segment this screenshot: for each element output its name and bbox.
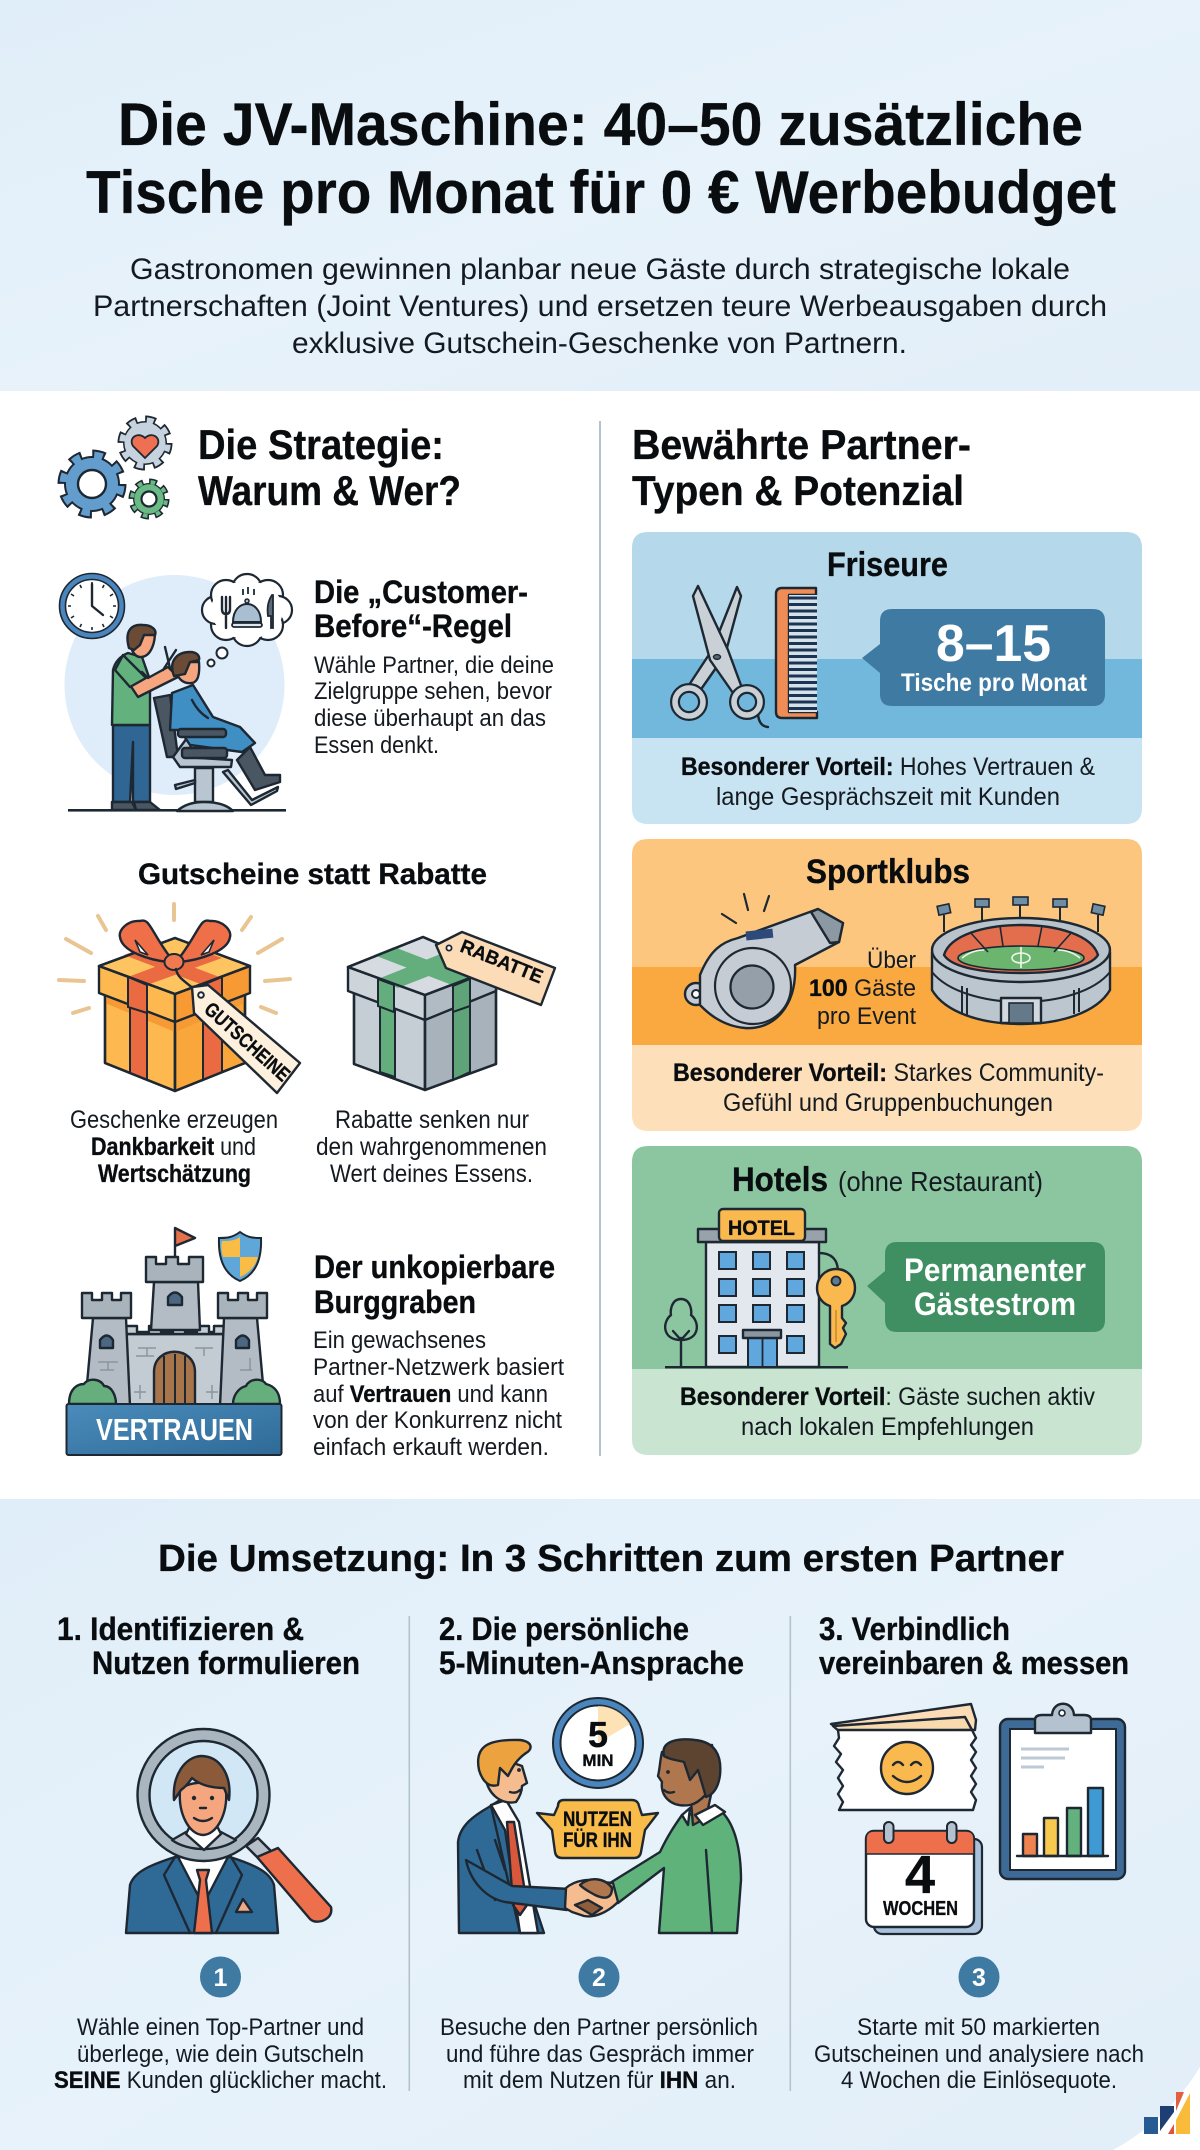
title: [86, 91, 1116, 226]
step heading: 1. Identifizieren &: [57, 1611, 304, 1647]
benefit text: Besonderer Vorteil: Gäste suchen aktiv: [680, 1383, 1095, 1411]
number badge: 1: [214, 1964, 228, 1992]
text: customer before rule: [314, 574, 554, 759]
caption: gifts: Dankbarkeit und: [91, 1133, 256, 1161]
icon: comb: [776, 588, 817, 718]
benefit text: [681, 753, 1095, 811]
icon: hotel building: [665, 1209, 855, 1368]
icon: calendar: WOCHEN: [883, 1898, 958, 1920]
title: Die JV-Maschine: 40–50 zusätzliche: [118, 91, 1083, 158]
icon: calendar: [866, 1822, 982, 1934]
step text: Wähle einen Top-Partner und: [77, 2014, 364, 2041]
heading: vouchers vs discounts: Gutscheine statt Rabatte: [138, 858, 487, 891]
stat text: [809, 947, 916, 1030]
icon: gears: [63, 420, 168, 516]
text: moat: Partner-Netzwerk basiert: [313, 1354, 564, 1381]
icon: magnifier on person: [126, 1729, 331, 1933]
discount tag: RABATTE: [457, 936, 546, 988]
step heading: Nutzen formulieren: [92, 1645, 360, 1681]
step heading: [819, 1611, 1129, 1681]
icon: gift with voucher tag: [59, 904, 300, 1093]
subtitle: exklusive Gutschein-Geschenke von Partnern.: [292, 327, 907, 360]
heading: strategy: [198, 421, 461, 514]
heading: partner types: Typen & Potenzial: [632, 467, 964, 514]
number badge: 3: [972, 1964, 986, 1992]
title: Tische pro Monat für 0 € Werbebudget: [86, 159, 1116, 226]
voucher tag: [192, 985, 300, 1093]
icon: castle with trust moat: [66, 1228, 282, 1455]
timer: [553, 1698, 643, 1788]
step heading: 5-Minuten-Ansprache: [439, 1645, 744, 1681]
benefit text: nach lokalen Empfehlungen: [741, 1413, 1034, 1441]
benefit text: Besonderer Vorteil: Hohes Vertrauen &: [681, 753, 1095, 781]
step heading: 3. Verbindlich: [819, 1611, 1010, 1647]
step 3: [814, 1611, 1144, 2094]
icon: thought bubble: [202, 574, 292, 666]
heading: implementation: Die Umsetzung: In 3 Schritten zum ersten Partner: [158, 1538, 1064, 1580]
step text: [814, 2014, 1144, 2094]
step text: 4 Wochen die Einlösequote.: [841, 2067, 1117, 2094]
step heading: [439, 1611, 744, 1681]
panel: implementation: [0, 1499, 1200, 2150]
icon: clock: [60, 574, 124, 638]
icon: hotel building: HOTEL: [728, 1217, 795, 1240]
voucher tag: GUTSCHEINE: [200, 998, 294, 1086]
heading: strategy: Warum & Wer?: [198, 467, 461, 514]
banner: benefit: [537, 1800, 658, 1858]
step text: Starte mit 50 markierten: [857, 2014, 1100, 2041]
text: moat: Ein gewachsenes: [313, 1327, 486, 1354]
caption: discounts: [316, 1106, 547, 1188]
icon: handshake people: [458, 1698, 741, 1933]
heading: strategy: Die Strategie:: [198, 421, 444, 468]
heading: partner types: Bewährte Partner-: [632, 421, 971, 468]
step text: [440, 2014, 758, 2094]
corner logo: [1113, 2067, 1200, 2150]
step text: Gutscheinen und analysiere nach: [814, 2041, 1144, 2068]
callout: permanent guest flow: Gästestrom: [914, 1286, 1076, 1322]
discount tag: [436, 932, 555, 1005]
timer: MIN: [582, 1751, 614, 1770]
banner: benefit: FÜR IHN: [563, 1829, 632, 1852]
icon: clipboard chart: [1000, 1704, 1125, 1879]
caption: gifts: [70, 1106, 278, 1188]
number badge: [578, 1956, 620, 1998]
icon: scissors: [675, 586, 768, 727]
left man: [458, 1740, 570, 1933]
banner: benefit: NUTZEN: [563, 1808, 632, 1831]
card title: Hotels: [732, 1161, 828, 1199]
benefit text: Gefühl und Gruppenbuchungen: [723, 1089, 1053, 1117]
step text: [54, 2014, 387, 2094]
number badge: [200, 1956, 241, 1998]
step 1: [54, 1611, 387, 2094]
step text: und führe das Gespräch immer: [446, 2041, 754, 2068]
heading: partner types: [632, 421, 971, 514]
caption: discounts: Rabatte senken nur: [335, 1106, 529, 1134]
subtitle: Partnerschaften (Joint Ventures) und ersetzen teure Werbeausgaben durch: [93, 290, 1107, 323]
callout: 8-15: [862, 609, 1105, 706]
card title: Sportklubs: [806, 853, 970, 891]
step text: mit dem Nutzen für IHN an.: [463, 2067, 736, 2094]
benefit text: lange Gesprächszeit mit Kunden: [716, 783, 1060, 811]
card title: Friseure: [827, 546, 948, 584]
step text: Besuche den Partner persönlich: [440, 2014, 758, 2041]
callout: permanent guest flow: [867, 1242, 1105, 1332]
number badge: [958, 1956, 1000, 1998]
step heading: 2. Die persönliche: [439, 1611, 689, 1647]
text: moat: auf Vertrauen und kann: [313, 1381, 548, 1408]
handshake: [565, 1879, 618, 1916]
caption: discounts: den wahrgenommenen: [316, 1133, 547, 1161]
text: customer before rule: Wähle Partner, die deine: [314, 652, 554, 679]
caption: gifts: Geschenke erzeugen: [70, 1106, 278, 1134]
stat text: pro Event: [817, 1003, 916, 1030]
callout: 8-15: Tische pro Monat: [901, 669, 1088, 697]
text: customer before rule: Essen denkt.: [314, 732, 439, 759]
text: customer before rule: diese überhaupt an das: [314, 705, 546, 732]
icon: castle with trust moat: VERTRAUEN: [96, 1412, 253, 1447]
stylist: [112, 625, 178, 810]
illustration: barber scene: [60, 574, 292, 812]
step 2: [439, 1611, 758, 2094]
benefit text: Besonderer Vorteil: Starkes Community-: [673, 1059, 1104, 1087]
subtitle: [93, 253, 1107, 360]
text: moat: [313, 1249, 564, 1461]
benefit text: [680, 1383, 1095, 1441]
panel: Hotels card: [632, 1146, 1142, 1455]
callout: 8-15: 8–15: [936, 615, 1051, 673]
text: moat: Burggraben: [314, 1284, 476, 1320]
shield: [219, 1232, 261, 1281]
icon: whistle: [685, 894, 843, 1028]
panel: strategy: [59, 420, 564, 1461]
step heading: [57, 1611, 360, 1681]
customer in chair: [154, 652, 280, 811]
icon: calendar: 4: [905, 1845, 935, 1905]
subtitle: Gastronomen gewinnen planbar neue Gäste durch strategische lokale: [130, 253, 1070, 286]
icon: vouchers: [831, 1704, 976, 1810]
panel: Sportklubs card: [632, 839, 1142, 1131]
text: customer before rule: Before“-Regel: [314, 608, 512, 644]
step text: überlege, wie dein Gutscheln: [77, 2041, 364, 2068]
text: moat: Der unkopierbare: [314, 1249, 555, 1285]
icon: stadium: [932, 897, 1110, 1024]
header panel: [0, 0, 1200, 391]
step heading: vereinbaren & messen: [819, 1645, 1129, 1681]
icon: grey gift with discount tag: [348, 932, 555, 1090]
text: customer before rule: Zielgruppe sehen, bevor: [314, 678, 552, 705]
stat text: Über: [867, 947, 916, 974]
card title: [732, 1161, 1043, 1199]
card title: (ohne Restaurant): [838, 1166, 1043, 1197]
number badge: 2: [592, 1964, 606, 1992]
icon: key: [817, 1253, 855, 1348]
benefit text: [673, 1059, 1104, 1117]
panel: Friseure card: [632, 532, 1142, 824]
caption: discounts: Wert deines Essens.: [330, 1160, 533, 1188]
callout: permanent guest flow: Permanenter: [904, 1252, 1086, 1288]
text: moat: einfach erkauft werden.: [313, 1434, 549, 1461]
right man: [610, 1739, 741, 1933]
text: customer before rule: Die „Customer-: [314, 574, 528, 610]
stat text: 100 Gäste: [809, 975, 916, 1002]
caption: gifts: Wertschätzung: [98, 1160, 251, 1188]
step text: SEINE Kunden glücklicher macht.: [54, 2067, 387, 2094]
timer: 5: [588, 1714, 608, 1755]
text: moat: von der Konkurrenz nicht: [313, 1407, 562, 1434]
